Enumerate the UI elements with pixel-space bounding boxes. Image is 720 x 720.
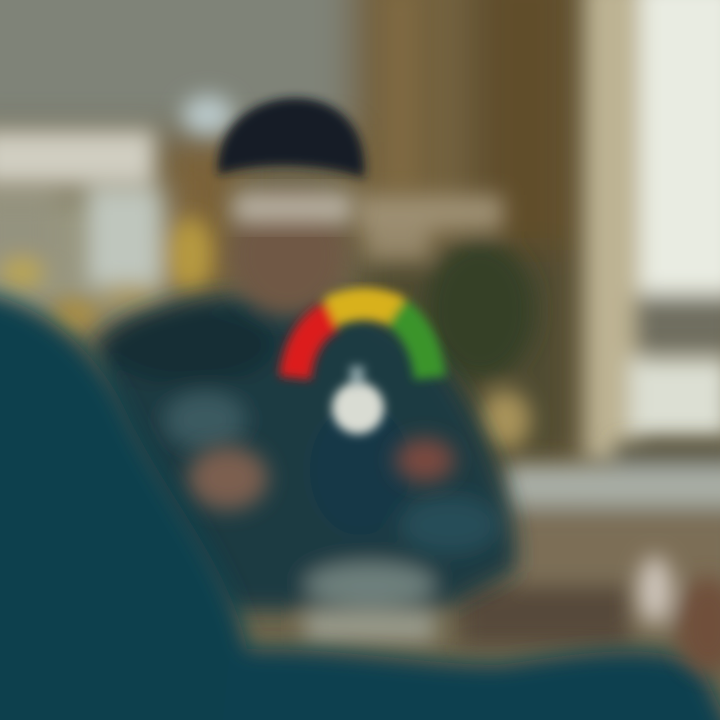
shelf and white cabinet bbox=[0, 95, 234, 333]
window and light curtain bbox=[585, 0, 720, 460]
person head and face bbox=[218, 98, 364, 317]
foreground shoulder and arm bbox=[0, 290, 720, 720]
person body bbox=[95, 294, 516, 642]
rainbow gauge icon bbox=[295, 304, 430, 378]
wall detail, plant and lamp behind person bbox=[358, 195, 535, 450]
white phone icon bbox=[332, 366, 384, 434]
person hands bbox=[188, 438, 455, 510]
table and sofa on the right bbox=[460, 442, 720, 645]
hand and white object bottom right bbox=[638, 556, 720, 673]
